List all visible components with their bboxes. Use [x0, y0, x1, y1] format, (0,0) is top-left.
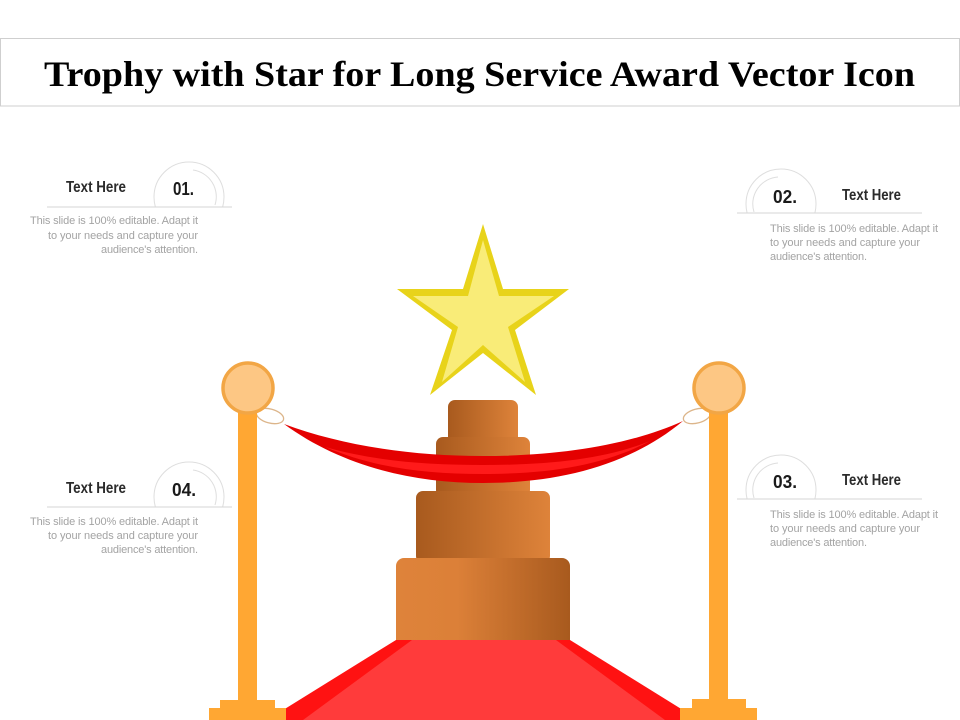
callout 03: audience's attention. — [770, 537, 867, 549]
callout 03: 03. — [773, 471, 797, 492]
callout 03: Text Here — [842, 472, 901, 489]
callout 02: 02. — [773, 186, 797, 207]
callout 04: audience's attention. — [101, 544, 198, 556]
icon: red carpet — [267, 640, 699, 720]
callout 04: to your needs and capture your — [48, 530, 198, 542]
icon: left stanchion — [209, 363, 286, 720]
callout 02: Text Here — [842, 187, 901, 204]
callout 04: 04. — [172, 479, 196, 500]
title — [0, 38, 960, 106]
icon: trophy base tiers — [396, 400, 570, 640]
callout 01: This slide is 100% editable. Adapt it — [30, 215, 198, 227]
callout 03: This slide is 100% editable. Adapt it — [770, 509, 938, 521]
callout 02: audience's attention. — [770, 251, 867, 263]
callout 01: to your needs and capture your — [48, 230, 198, 242]
callout 01: 01. — [173, 178, 194, 199]
callout 04: Text Here — [66, 480, 126, 497]
callout 03: to your needs and capture your — [770, 523, 920, 535]
callout 03 — [737, 455, 938, 549]
callout 02: to your needs and capture your — [770, 237, 920, 249]
callout 01 — [30, 162, 232, 256]
callout 04: This slide is 100% editable. Adapt it — [30, 516, 198, 528]
icon: red ribbon — [284, 421, 683, 483]
callout 01: Text Here — [66, 179, 126, 196]
icon: right stanchion — [680, 363, 757, 720]
title: Trophy with Star for Long Service Award Vector Icon — [44, 54, 915, 94]
callout 02: This slide is 100% editable. Adapt it — [770, 223, 938, 235]
callout 04 — [30, 462, 232, 556]
callout 02 — [737, 169, 938, 263]
icon: star — [397, 224, 569, 395]
callout 01: audience's attention. — [101, 244, 198, 256]
